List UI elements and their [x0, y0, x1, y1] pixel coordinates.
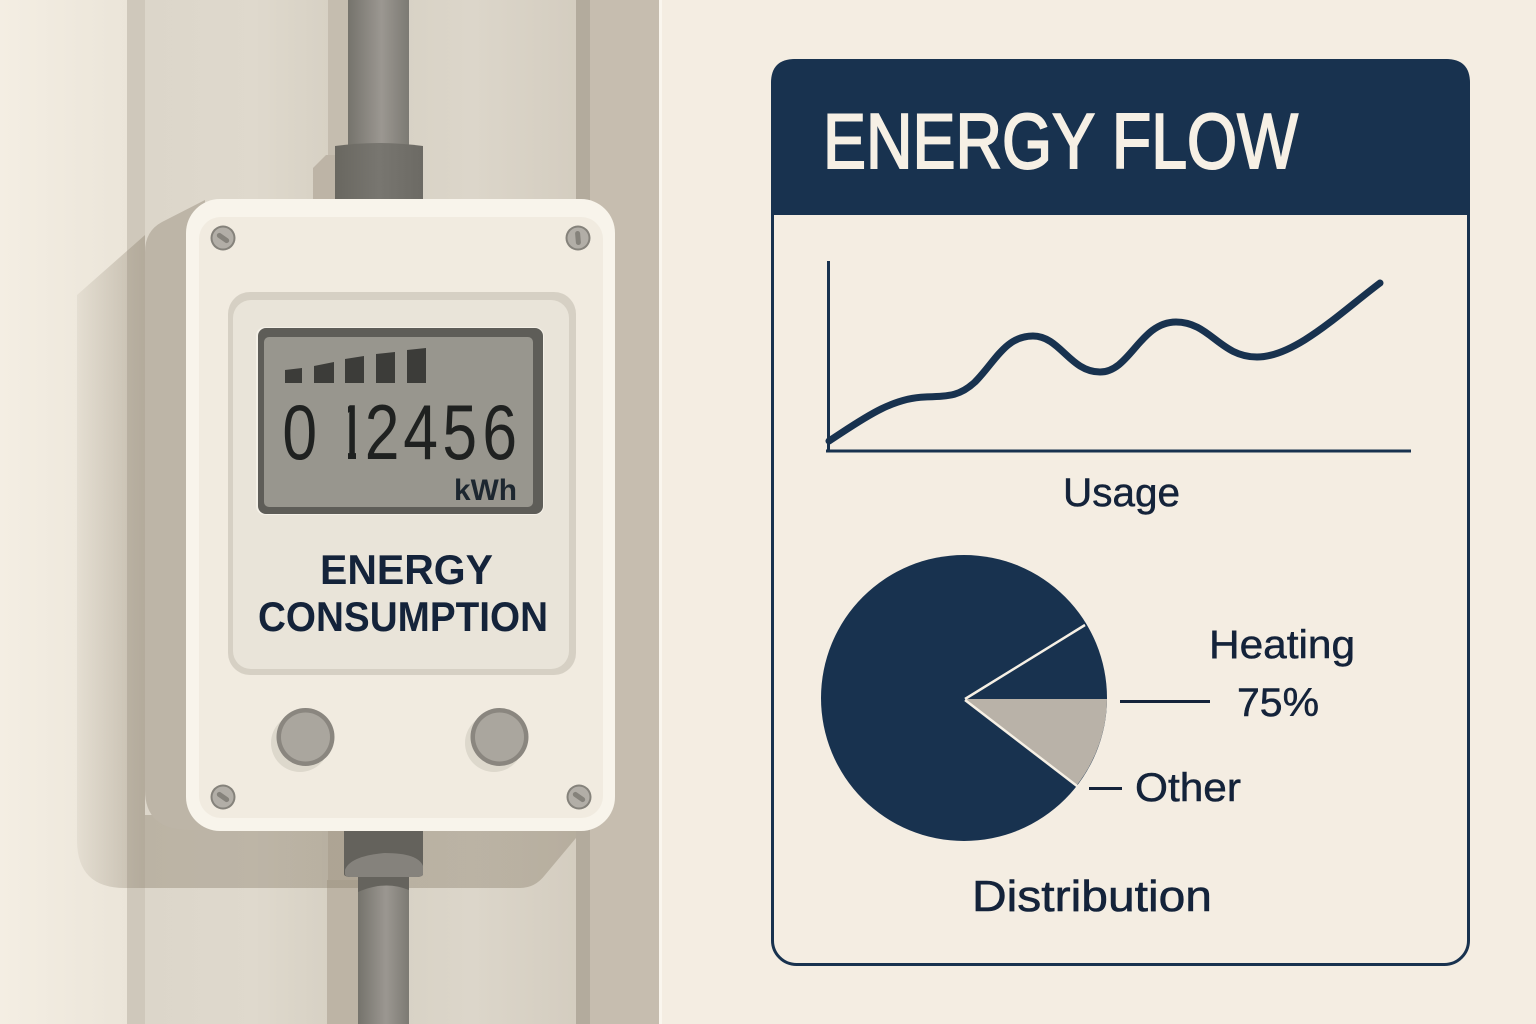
label: energy consumption — [258, 546, 548, 640]
button: left — [271, 708, 334, 772]
line chart: usage — [826, 261, 1411, 452]
leader line: other — [1089, 787, 1122, 790]
title: ENERGY FLOW — [823, 97, 1298, 185]
label: 75%: 75% — [1237, 681, 1319, 725]
label: energy consumption: CONSUMPTION — [258, 593, 548, 640]
meter drop shadow — [77, 235, 576, 888]
unit label: kWh — [454, 474, 517, 507]
chart label: usage: Usage — [1063, 471, 1180, 515]
LCD display — [256, 327, 544, 515]
label: energy consumption: ENERGY — [320, 546, 493, 593]
screw: bottom right — [566, 784, 592, 810]
meter body — [186, 199, 615, 831]
LCD segment gaps — [335, 400, 366, 462]
panel: energy flow card — [771, 59, 1470, 964]
label: other: Other — [1135, 766, 1241, 810]
wall background — [0, 0, 662, 1024]
inner label panel — [228, 292, 576, 675]
label: heating: Heating — [1209, 623, 1355, 667]
card header — [771, 59, 1470, 215]
pie chart: distribution — [821, 555, 1107, 841]
leader line: heating — [1120, 700, 1210, 703]
signal bars — [285, 348, 426, 383]
screw: top left — [210, 226, 236, 250]
screw: bottom left — [210, 784, 236, 810]
meter back plate — [145, 200, 400, 830]
LCD reading: 012456 — [282, 388, 517, 476]
screw: top right — [566, 226, 590, 250]
button: right — [465, 708, 528, 772]
upper conduit pipe — [313, 0, 423, 205]
lower conduit pipe — [344, 828, 423, 1024]
chart label: distribution: Distribution — [972, 872, 1212, 921]
